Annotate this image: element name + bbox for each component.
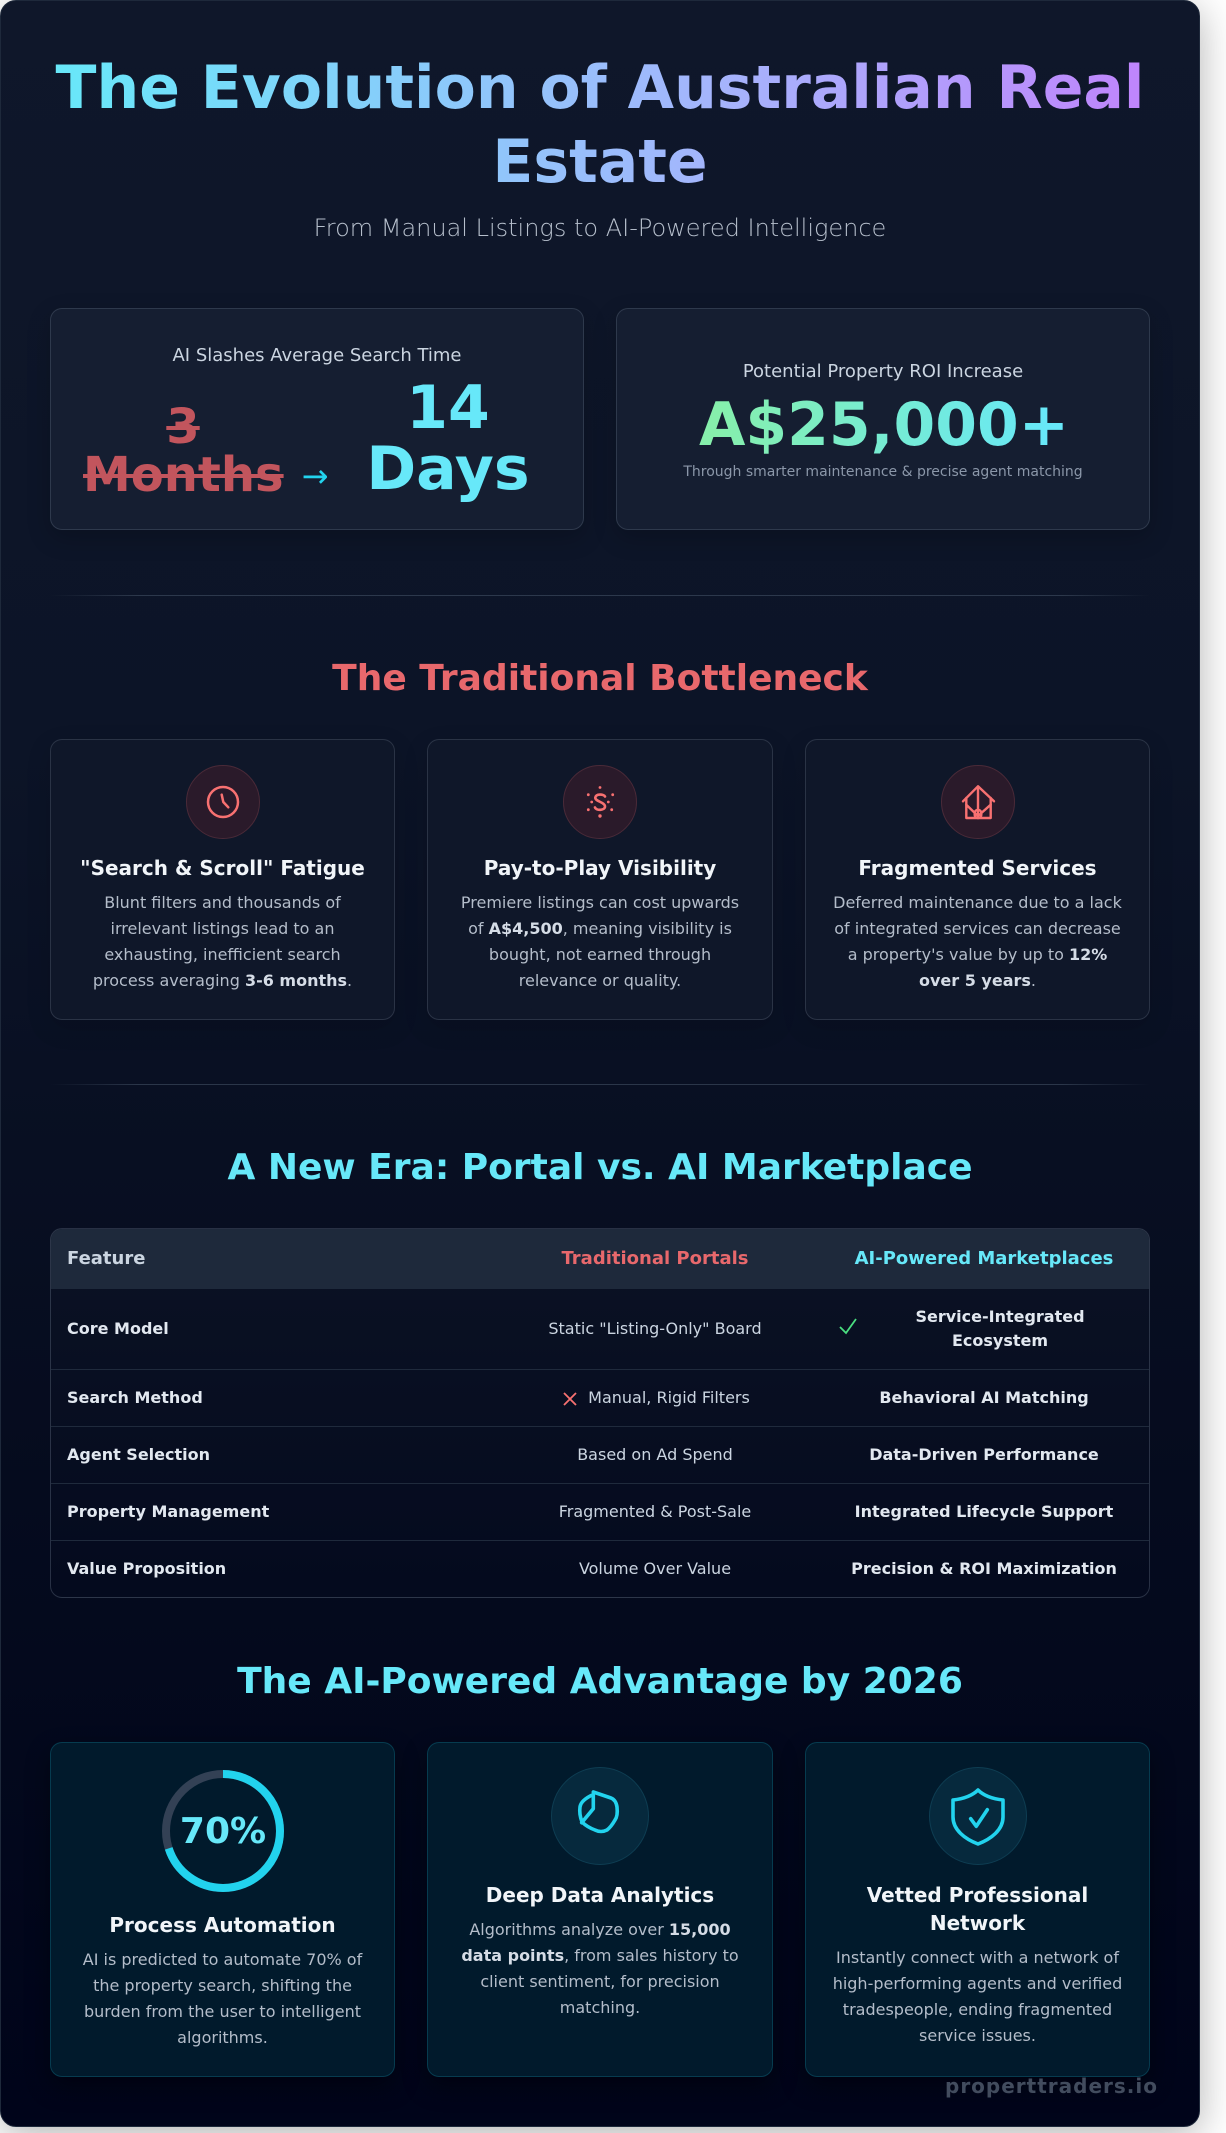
card title: Fragmented Services: [858, 856, 1097, 880]
icon: dollar: [563, 765, 637, 839]
traditional value: Fragmented & Post-Sale: [559, 1502, 751, 1521]
ROI value: A$25,000+: [699, 390, 1069, 460]
card title: Network: [930, 1911, 1025, 1935]
arrow: →: [302, 457, 328, 495]
AI value: Data-Driven Performance: [869, 1445, 1099, 1464]
traditional value: Manual, Rigid Filters: [588, 1388, 750, 1407]
row: property management: [51, 1483, 1149, 1540]
card text: AI is predicted to automate 70% of: [83, 1950, 362, 1969]
title: Estate: [492, 127, 708, 197]
stat label: Potential Property ROI Increase: [743, 361, 1023, 382]
watermark: properttraders.io: [945, 2074, 1158, 2098]
panel: ROI stat: [616, 308, 1150, 530]
card text: service issues.: [919, 2026, 1036, 2045]
row: value proposition: [51, 1540, 1149, 1599]
card title: Deep Data Analytics: [486, 1883, 714, 1907]
card text: Premiere listings can cost upwards: [461, 893, 739, 912]
AI value: Service-Integrated: [915, 1307, 1085, 1326]
card text: Algorithms analyze over 15,000: [469, 1920, 731, 1939]
card text: [461, 893, 739, 990]
title: [1, 51, 1199, 199]
traditional value: Static "Listing-Only" Board: [548, 1319, 762, 1338]
AI value: Integrated Lifecycle Support: [855, 1502, 1113, 1521]
card text: data points, from sales history to: [461, 1946, 739, 1965]
card text: of A$4,500, meaning visibility is: [468, 919, 732, 938]
icon: cross: [563, 1392, 577, 1406]
new value: 14 days: 14: [406, 373, 490, 443]
new value: 14 days: [366, 373, 530, 504]
chart: 70% progress ring: 70%: [180, 1811, 266, 1852]
panel: pay-to-play: [427, 739, 773, 1020]
card text: Blunt filters and thousands of: [104, 893, 341, 912]
card text: over 5 years.: [919, 971, 1036, 990]
card title: Process Automation: [109, 1913, 336, 1937]
heading: new era: A New Era: Portal vs. AI Marketplace: [227, 1147, 973, 1188]
AI value: Behavioral AI Matching: [879, 1388, 1089, 1407]
card title: "Search & Scroll" Fatigue: [80, 856, 365, 880]
card text: matching.: [560, 1998, 640, 2017]
card text: a property's value by up to 12%: [848, 945, 1107, 964]
subtitle: From Manual Listings to AI-Powered Intelligence: [314, 214, 886, 242]
card text: algorithms.: [177, 2028, 268, 2047]
new value: 14 days: Days: [366, 434, 530, 504]
icon: house: [941, 765, 1015, 839]
card title: Pay-to-Play Visibility: [484, 856, 716, 880]
card title: [866, 1883, 1088, 1935]
panel: search fatigue: [50, 739, 395, 1020]
title: The Evolution of Australian Real: [56, 53, 1144, 123]
card text: [82, 1950, 363, 2047]
card text: [833, 893, 1122, 990]
card text: bought, not earned through: [489, 945, 711, 964]
AI value: Precision & ROI Maximization: [851, 1559, 1117, 1578]
card text: [461, 1920, 739, 2017]
row: agent selection: [51, 1426, 1149, 1483]
feature: Agent Selection: [67, 1445, 210, 1464]
card text: relevance or quality.: [519, 971, 681, 990]
icon: data: [551, 1767, 649, 1865]
panel: process automation: [50, 1742, 395, 2077]
icon: clock: [186, 765, 260, 839]
comparison table: [50, 1228, 1150, 1598]
card text: irrelevant listings lead to an: [111, 919, 334, 938]
card title: Vetted Professional: [867, 1883, 1088, 1907]
feature: Core Model: [67, 1319, 169, 1338]
card text: tradespeople, ending fragmented: [843, 2000, 1112, 2019]
card text: Instantly connect with a network of: [836, 1948, 1119, 1967]
AI value: [915, 1307, 1085, 1350]
header: traditional portals: Traditional Portals: [562, 1248, 748, 1269]
icon: check: [839, 1318, 857, 1334]
card text: high-performing agents and verified: [833, 1974, 1122, 1993]
chart: 70% progress ring: [162, 1770, 284, 1892]
traditional value: Based on Ad Spend: [577, 1445, 733, 1464]
old value: 3 months: [83, 399, 284, 503]
card text: exhausting, inefficient search: [104, 945, 341, 964]
traditional value: Volume Over Value: [579, 1559, 731, 1578]
card text: [93, 893, 352, 990]
card text: of integrated services can decrease: [834, 919, 1121, 938]
card text: [833, 1948, 1122, 2045]
old value: 3 months: 3: [166, 399, 200, 455]
card text: the property search, shifting the: [93, 1976, 352, 1995]
header: feature: Feature: [67, 1248, 145, 1269]
icon: shield: [929, 1767, 1027, 1865]
card text: burden from the user to intelligent: [84, 2002, 361, 2021]
panel: fragmented services: [805, 739, 1150, 1020]
feature: Search Method: [67, 1388, 203, 1407]
panel: vetted network: [805, 1742, 1150, 2077]
row: core model: [67, 1307, 1085, 1350]
old value: 3 months: Months: [83, 447, 284, 503]
feature: Property Management: [67, 1502, 269, 1521]
card text: client sentiment, for precision: [480, 1972, 720, 1991]
AI value: Ecosystem: [952, 1331, 1048, 1350]
feature: Value Proposition: [67, 1559, 226, 1578]
panel: search time stat: [50, 308, 584, 530]
header: AI marketplaces: AI-Powered Marketplaces: [855, 1248, 1113, 1269]
stat note: Through smarter maintenance & precise agent matching: [683, 464, 1083, 480]
card text: Deferred maintenance due to a lack: [833, 893, 1122, 912]
heading: traditional bottleneck: The Traditional Bottleneck: [332, 658, 868, 699]
table header: [51, 1229, 1149, 1289]
card text: process averaging 3-6 months.: [93, 971, 352, 990]
stat label: AI Slashes Average Search Time: [172, 345, 462, 366]
panel: deep data analytics: [427, 1742, 773, 2077]
heading: AI advantage: The AI-Powered Advantage by 2026: [237, 1661, 963, 1702]
row: search method: [51, 1369, 1149, 1426]
